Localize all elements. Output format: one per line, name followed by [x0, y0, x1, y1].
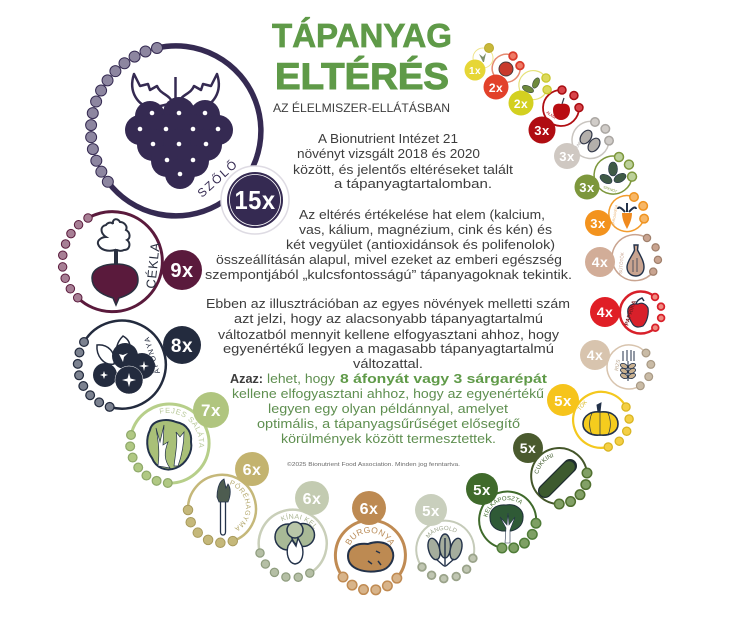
plant: rice 4x [580, 340, 651, 389]
bead [484, 44, 494, 52]
text block: explanation [206, 297, 570, 371]
text block: explanation: egyenértékű legyen a magasabb tápanyagtartalmú [223, 342, 554, 356]
plant: spinach 3x [574, 156, 632, 200]
ring [78, 212, 162, 312]
ring [188, 475, 256, 541]
label: KÍNAI KEL: KÍNAI KEL [280, 513, 316, 529]
text block: intro: növényt vizsgált 2018 és 2020 [297, 147, 480, 161]
ring [473, 48, 493, 68]
label: SZŐLŐ: SZŐLŐ [194, 157, 240, 200]
beads [619, 157, 632, 177]
ring [479, 492, 536, 548]
text block: explanation: azt jelzi, hogy az alacsonyabb tápanyagtartalmú [234, 312, 543, 326]
ring [612, 235, 653, 281]
ring [108, 46, 261, 216]
plant: oats 3x [554, 121, 609, 169]
icon: zucchini [545, 466, 570, 491]
beads [655, 297, 662, 328]
heading: ELTÉRÉS: ELTÉRÉS [275, 56, 449, 97]
ring [573, 392, 626, 448]
label: CUKKINI: CUKKINI [534, 453, 554, 474]
plant: pepper 4x [590, 292, 662, 334]
icon: oats [578, 128, 602, 154]
ring [259, 510, 327, 573]
beads [91, 48, 157, 182]
badge: 3x: 3x [559, 149, 575, 164]
beads [260, 553, 310, 578]
plant: chard 5x [415, 494, 478, 584]
plant: greens 2x [508, 71, 548, 116]
icon: potato [348, 542, 393, 572]
badge: 9x: 9x [170, 260, 194, 282]
plant: zucchini 5x [513, 433, 592, 510]
badge: 3x: 3x [590, 216, 606, 231]
badge: 2x: 2x [489, 81, 503, 95]
icon: pepper [628, 298, 648, 327]
plant: lettuce 7x [125, 392, 229, 488]
beads [647, 238, 658, 272]
subtitle: AZ ÉLELMISZER-ELLÁTÁSBAN [273, 102, 450, 115]
beads [608, 407, 629, 447]
plant: blueberry 8x [78, 321, 201, 409]
ring [531, 448, 587, 504]
text block: green example: Azaz: [230, 372, 263, 386]
text block: evaluation: szempontjából „kulcsfontosságú” tápanyagoknak tekintik. [205, 268, 572, 282]
text block: green example: legyen egy olyan példánnyal, amelyet [268, 402, 509, 416]
title [272, 17, 452, 115]
icon: apple [553, 98, 570, 120]
ring [492, 54, 520, 82]
icon: kale [490, 505, 523, 543]
badge: 3x: 3x [534, 123, 550, 138]
text block: explanation: változatból mennyit kellene elfogyasztani ahhoz, hogy [218, 328, 560, 342]
ring [607, 345, 646, 389]
label: SÜTŐTÖK: SÜTŐTÖK [617, 252, 625, 274]
plant: pumpkin 5x [547, 384, 629, 448]
icon: greens [521, 77, 541, 94]
icon: blueberries [93, 336, 155, 394]
label: FEJES SALÁTA: FEJES SALÁTA [160, 408, 204, 448]
text block: intro: a tápanyagtartalomban. [334, 177, 492, 191]
beads [595, 122, 609, 141]
plant: tomato 2x [484, 54, 520, 100]
label: BURGONYA: BURGONYA [345, 527, 394, 546]
beads [422, 558, 473, 579]
ring [572, 121, 609, 158]
text block: green example [230, 372, 548, 446]
text block: explanation: Ebben az illusztrációban az egyes növények melletti szám [206, 297, 570, 311]
text block: evaluation: vas, kálium, magnézium, cink és kén) és [299, 223, 552, 237]
plant: beet 9x [62, 212, 202, 312]
beads [546, 78, 548, 90]
beads [343, 577, 397, 590]
text block: intro [293, 132, 514, 191]
badge: 8x: 8x [171, 336, 193, 357]
beads [130, 435, 168, 483]
text block: green example: optimális, a tápanyagsűrűséget elősegítő [257, 417, 520, 431]
ring [543, 90, 579, 126]
beads [559, 473, 587, 504]
icon: spinach [598, 162, 628, 186]
label: ZAB: ZAB [574, 140, 582, 150]
badge: 3x: 3x [579, 180, 595, 195]
label: ALMA: ALMA [545, 110, 557, 120]
ring [594, 156, 632, 194]
icon: sprout [479, 53, 486, 62]
text block: green example: körülmények között termesztettek. [281, 432, 496, 446]
badge: 4x: 4x [597, 304, 613, 320]
icon: leek [217, 479, 230, 535]
badge: 6x: 6x [243, 462, 261, 479]
icon: grape [125, 74, 233, 189]
badge: 1x: 1x [469, 66, 481, 77]
icon: lettuce [147, 420, 191, 470]
beads [640, 353, 651, 386]
label: KELKÁPOSZTA: KELKÁPOSZTA [483, 496, 522, 517]
icon: carrot [618, 203, 636, 229]
ring [519, 71, 547, 100]
plant: leek 6x [182, 452, 269, 548]
plant: apple 3x [528, 90, 579, 144]
text block: green example: lehet, hogy [267, 372, 336, 386]
heading: TÁPANYAG: TÁPANYAG [272, 17, 452, 54]
text block: evaluation: két vegyület (antioxidánsok és polifenolok) [286, 238, 555, 252]
label: TÖK: TÖK [576, 399, 589, 412]
beads [562, 90, 579, 108]
plant: squash 4x [585, 235, 658, 281]
badge: 5x: 5x [473, 482, 491, 499]
copyright: ©2025 Bionutrient Food Association. Minden jog fenntartva. [287, 461, 461, 468]
plant: potato 6x [334, 491, 407, 596]
text block: intro: A Bionutrient Intézet 21 [318, 132, 458, 146]
plant: onion 1x [464, 44, 494, 80]
icon: squash [627, 245, 644, 276]
beads [502, 523, 536, 549]
ring [131, 404, 209, 483]
text block: explanation: változattal. [353, 357, 423, 371]
ring [609, 196, 644, 232]
beads [513, 56, 520, 66]
badge: 5x: 5x [520, 440, 536, 456]
badge: 5x: 5x [554, 393, 572, 410]
icon: tomato [499, 62, 513, 76]
ring [335, 520, 405, 578]
badge: 6x: 6x [360, 501, 378, 518]
label: PÓRÉHAGYMA: PÓRÉHAGYMA [230, 480, 251, 531]
text block: green example: 8 áfonyát vagy 3 sárgarépát [340, 372, 548, 386]
badge: 15x [221, 166, 289, 234]
label: RIZS: RIZS [614, 358, 622, 371]
beads [78, 342, 110, 407]
badge: 7x: 7x [201, 401, 221, 420]
label: CÉKLA: CÉKLA [143, 242, 163, 289]
beads [188, 510, 233, 543]
label: SÁRGARÉPA: SÁRGARÉPA [610, 203, 619, 226]
icon: rice [620, 350, 636, 381]
icon: beet [92, 219, 138, 305]
ring [416, 521, 474, 567]
badge: 6x: 6x [303, 491, 321, 508]
label: MÁNGOLD: MÁNGOLD [426, 526, 457, 538]
beads [62, 218, 88, 298]
badge: 15x: 15x [234, 185, 276, 215]
badge: 4x: 4x [587, 347, 603, 363]
label: PAPRIKA: PAPRIKA [624, 299, 638, 327]
icon: bok choy [275, 522, 314, 564]
plant: bok choy 6x [255, 481, 329, 582]
text block: evaluation: Az eltérés értékelése hat elem (kalcium, [299, 208, 545, 222]
plant: kale 5x [466, 473, 542, 554]
ring [84, 321, 166, 409]
text block: intro: között, és jelentős eltéréseket talált [293, 163, 514, 177]
label: SPENÓT: SPENÓT [603, 184, 619, 194]
badge: 2x: 2x [514, 97, 528, 111]
label: ÁFONYA: ÁFONYA [142, 336, 162, 375]
ring [620, 292, 655, 334]
text block: green example: kellene elfogyasztani ahhoz, hogy az egyenértékű [232, 387, 544, 401]
plant: grape 15x [91, 46, 289, 234]
beads [634, 197, 645, 219]
badge: 4x: 4x [592, 254, 608, 270]
icon: chard [426, 534, 464, 567]
badge: 5x: 5x [422, 503, 440, 520]
icon: pumpkin [583, 403, 618, 435]
text block: evaluation: összeállításán alapul, mivel ezeket az emberi egészség [216, 253, 562, 267]
plant: carrot 3x [585, 196, 645, 236]
text block: evaluation [205, 208, 572, 282]
